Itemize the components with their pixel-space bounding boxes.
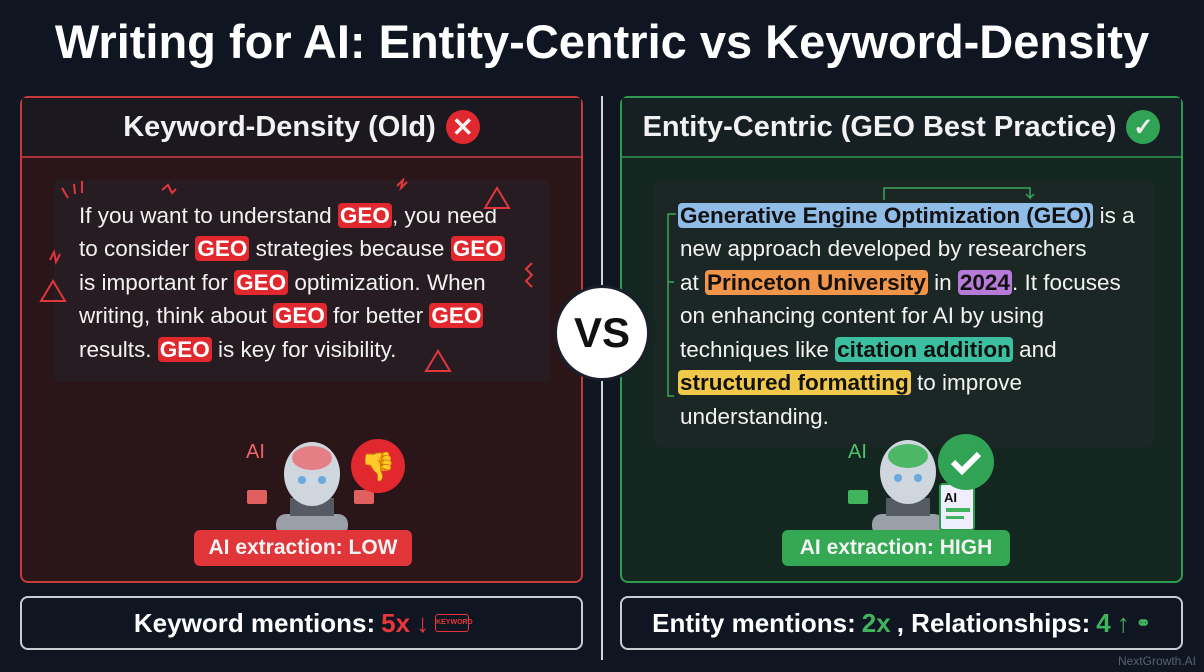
bar: entity mentions: 4 — [1096, 608, 1111, 638]
text block: keyword stuffed: is important for GEO optimization. When — [79, 270, 486, 295]
icon: robot with thumbs down — [246, 439, 405, 530]
panel header: entity-centric: Entity-Centric (GEO Best Practice) — [643, 110, 1116, 142]
text block: entity rich: understanding. — [680, 404, 829, 429]
VS circle — [554, 285, 650, 381]
icon: warning signs — [39, 178, 534, 372]
bar: entity mentions: ↑ — [1117, 608, 1130, 638]
bar: keyword mentions: 5x — [381, 608, 410, 638]
bar: entity mentions — [620, 596, 1183, 650]
badge: AI extraction LOW: AI extraction: LOW — [208, 536, 398, 559]
bar: keyword mentions: Keyword mentions: — [134, 608, 375, 638]
text block: keyword stuffed: results. GEO is key for visibility. — [79, 337, 396, 362]
icon: robot with thumbs down: 👎 — [361, 451, 395, 483]
text block: entity rich: on enhancing content for AI by using — [680, 303, 1044, 328]
badge: AI extraction LOW — [194, 530, 412, 566]
panel header: keyword-density — [22, 98, 581, 158]
text block: keyword stuffed: to consider GEO strategies because GEO — [79, 236, 503, 261]
bar: keyword mentions: KEYWORD — [436, 619, 473, 626]
text block: keyword stuffed — [54, 180, 550, 382]
icon: robot with check: AI — [848, 441, 867, 463]
panel: keyword-density — [20, 96, 583, 583]
text block: keyword stuffed: If you want to understand GEO, you need — [79, 203, 497, 228]
title: Writing for AI: Entity-Centric vs Keyword-Density — [55, 15, 1149, 68]
icon: robot with thumbs down: AI — [246, 441, 265, 463]
bar: keyword mentions: ↓ — [416, 608, 429, 638]
badge: AI extraction HIGH — [782, 530, 1010, 566]
panel: entity-centric — [620, 96, 1183, 583]
text block: entity rich: techniques like citation addition and — [680, 337, 1057, 362]
icon: robot with check — [848, 434, 994, 530]
text block: entity rich: Generative Engine Optimization (GEO) is a — [680, 203, 1135, 228]
panel header: entity-centric: ✓ — [1133, 114, 1153, 140]
text block: entity rich: at Princeton University in 2024. It focuses — [680, 270, 1121, 295]
watermark: NextGrowth.AI — [1118, 654, 1196, 668]
text block: entity rich — [654, 180, 1154, 447]
text block: entity rich: structured formatting to improve — [680, 370, 1022, 395]
panel header: keyword-density: Keyword-Density (Old) — [123, 110, 436, 142]
divider — [601, 96, 603, 660]
icon: robot with check: AI — [944, 490, 957, 505]
panel header: entity-centric — [622, 98, 1181, 158]
bar: keyword mentions — [20, 596, 583, 650]
bar: entity mentions: ⚭ — [1136, 612, 1151, 632]
panel header: keyword-density: ✕ — [452, 112, 474, 142]
bar: entity mentions: Entity mentions: , Relationships: — [652, 608, 1090, 638]
text block: entity rich: new approach developed by researchers — [680, 236, 1087, 261]
VS circle: VS — [574, 309, 630, 356]
text block: keyword stuffed: writing, think about GEO for better GEO — [79, 303, 481, 328]
badge: AI extraction HIGH: AI extraction: HIGH — [800, 536, 992, 559]
bar: entity mentions: 2x — [862, 608, 891, 638]
